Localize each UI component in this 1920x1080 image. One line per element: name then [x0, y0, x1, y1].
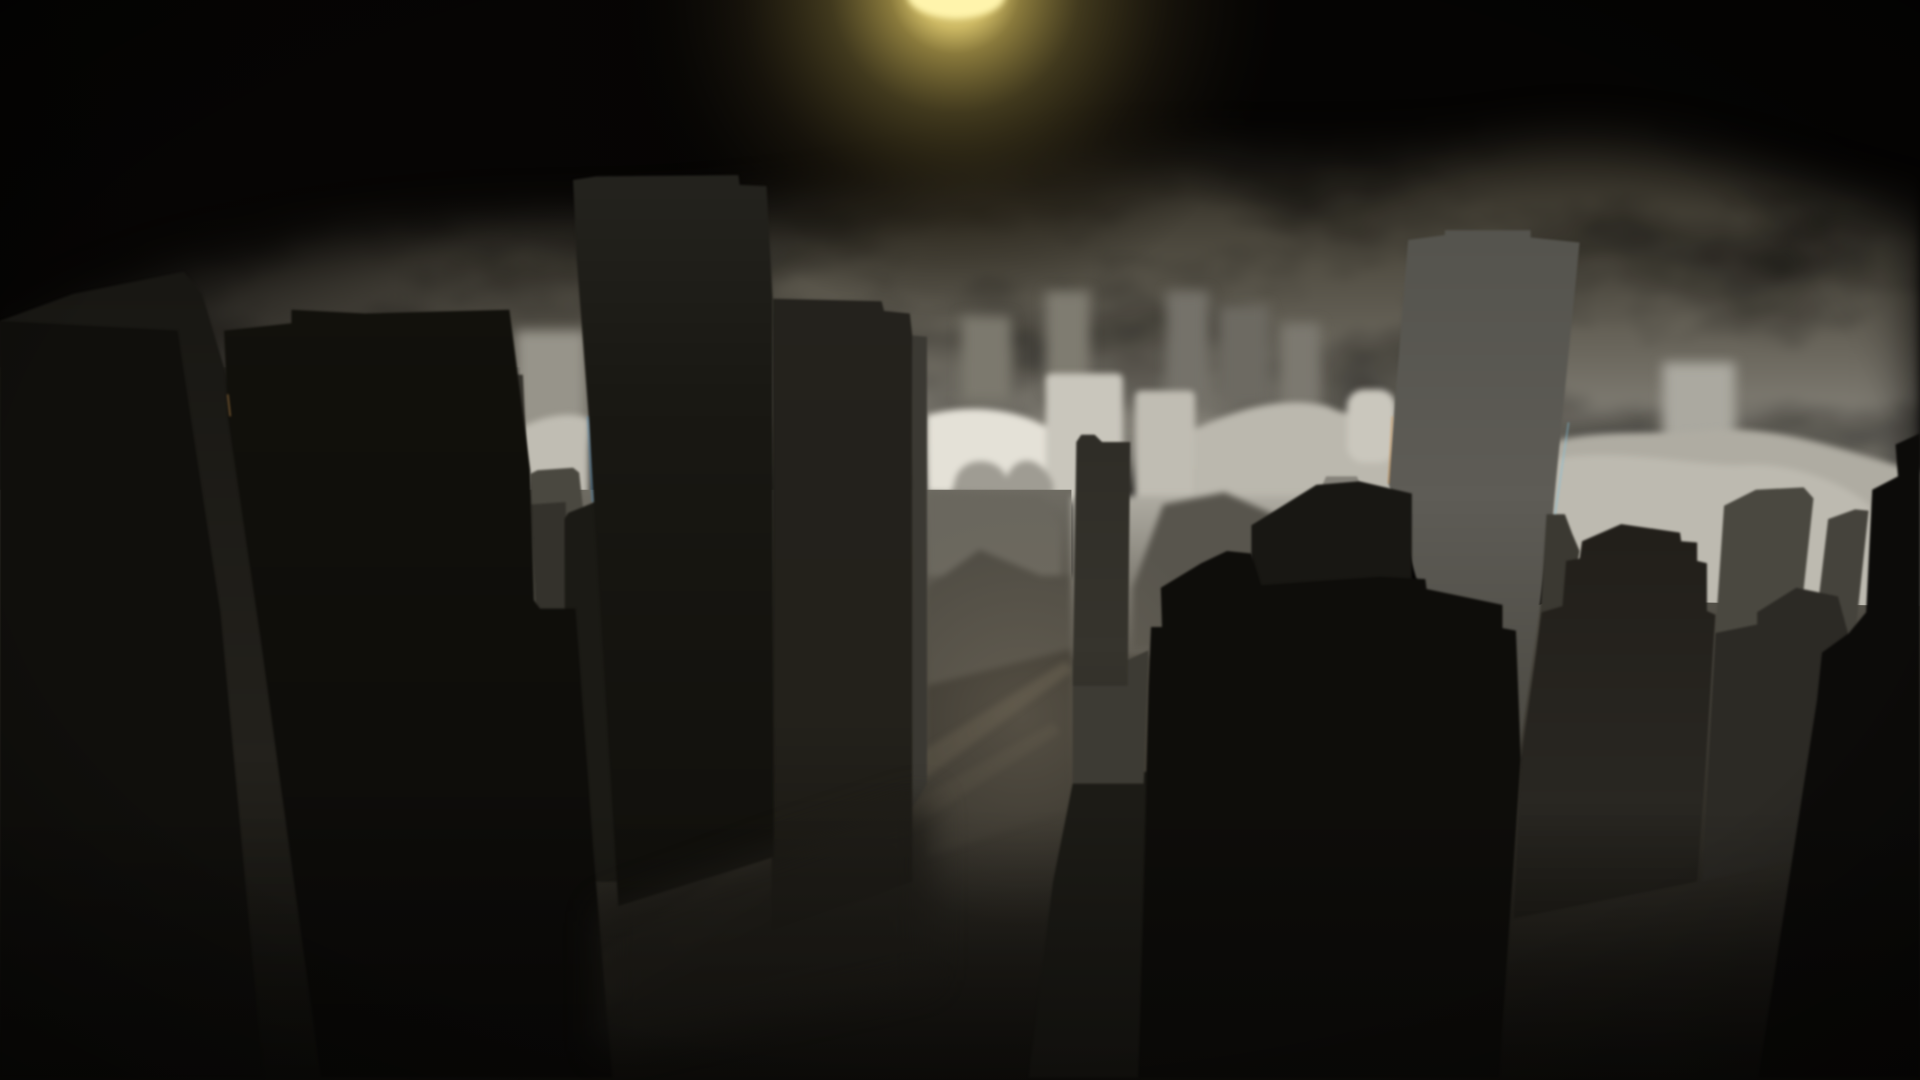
- pale tower right: [1389, 230, 1580, 759]
- smoke band: [0, 148, 1920, 490]
- tall dark tower: [573, 175, 774, 906]
- bright fog band: [516, 373, 1920, 612]
- chromatic edge fringes: [228, 394, 1569, 514]
- far-right dark building: [1758, 433, 1920, 1078]
- haze over tower bases: [600, 796, 931, 1053]
- right mid buildings: [1538, 487, 1869, 882]
- hazy city ground: [0, 490, 1920, 1080]
- bottom shadow: [0, 808, 1920, 1080]
- left background tower: [0, 272, 333, 1078]
- dark foreground building left: [224, 310, 612, 1078]
- mid-distance rooftops: [927, 492, 1402, 857]
- right stepped building: [1513, 524, 1716, 918]
- side slab next to tall tower: [771, 299, 927, 931]
- small grey buildings near centre: [516, 375, 618, 882]
- rear dark block: [1251, 476, 1412, 600]
- left sky dimming: [0, 0, 784, 637]
- narrow central tower: [1029, 435, 1149, 1078]
- sun glow: [624, 0, 1286, 318]
- haze behind left towers: [0, 367, 520, 637]
- distant blurred buildings: [516, 291, 1735, 473]
- large foreground dark building: [1139, 551, 1521, 1078]
- light ray: [404, 508, 1237, 1078]
- far-left dark building: [0, 321, 263, 1078]
